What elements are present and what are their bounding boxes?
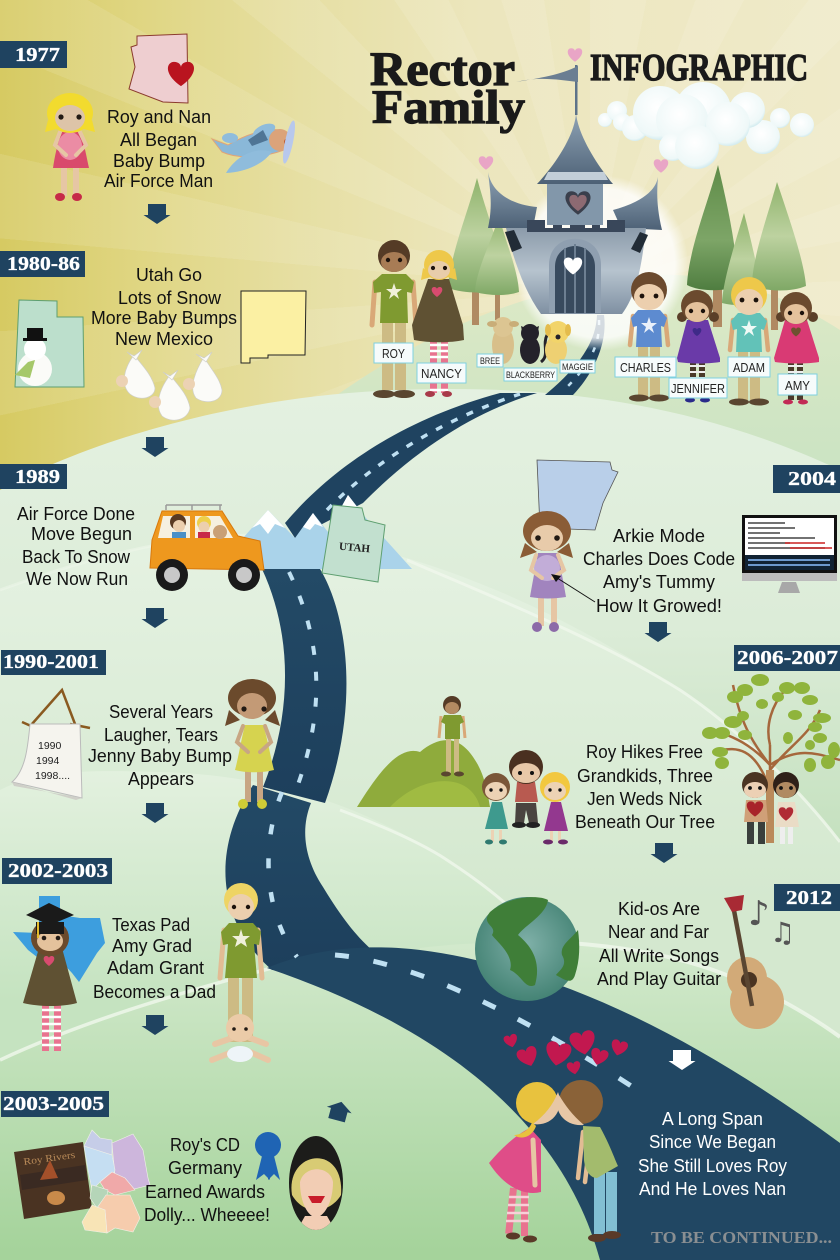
heading: 2004: 2004 bbox=[788, 468, 836, 490]
sign: Utah bbox=[322, 505, 385, 582]
pet: Maggie: MAGGIE bbox=[562, 362, 593, 372]
heading: 2012: 2012 bbox=[786, 887, 832, 909]
arrow down bbox=[142, 1015, 168, 1035]
small Roy hiker bbox=[439, 696, 465, 776]
title bbox=[370, 43, 808, 134]
door arch bbox=[549, 239, 601, 313]
snow caps bbox=[252, 495, 361, 534]
state: New Mexico bbox=[241, 291, 306, 363]
arrow down bbox=[650, 843, 678, 863]
tree right dark bbox=[687, 165, 738, 327]
pink heart top bbox=[568, 48, 582, 62]
icon: music notes: ♫ bbox=[770, 916, 795, 949]
text: 1990 verse: Jenny Baby Bump bbox=[88, 746, 232, 766]
text: 1990 verse: Several Years bbox=[109, 702, 213, 722]
tree left front bbox=[475, 216, 519, 320]
text: 2002 verse: Becomes a Dad bbox=[93, 982, 216, 1002]
pink heart right bbox=[654, 159, 668, 173]
person: Amy: AMY bbox=[785, 378, 810, 393]
photo: Dolly bbox=[289, 1136, 343, 1232]
text: Utah verse: More Baby Bumps bbox=[91, 308, 237, 328]
heart window bbox=[565, 191, 591, 215]
pet: Bree: BREE bbox=[480, 356, 500, 366]
person: Roy bbox=[372, 240, 416, 398]
state: Utah with snowman bbox=[15, 300, 84, 387]
text: 1977 verse bbox=[104, 107, 213, 191]
person: Nancy bbox=[412, 250, 466, 397]
tree right tall bbox=[752, 182, 806, 330]
icon: hanging calendar: 1998.... bbox=[35, 770, 70, 782]
grandkid boy red shirt bbox=[509, 750, 543, 828]
road: castle section bbox=[545, 315, 605, 395]
person: Adam: ADAM bbox=[733, 360, 765, 375]
pale road hill bbox=[0, 389, 840, 1260]
icon: orange car bbox=[150, 505, 264, 591]
text: Utah verse: New Mexico bbox=[115, 329, 213, 349]
right green foreground slope bbox=[420, 943, 840, 1260]
figure: pregnant Nan bbox=[45, 93, 95, 201]
figure: Adam with baby bbox=[212, 883, 268, 1062]
castle body bbox=[506, 228, 646, 314]
heading: 1977: 1977 bbox=[15, 44, 60, 66]
road: lower bend bbox=[225, 785, 372, 970]
text: closing verse: She Still Loves Roy bbox=[638, 1156, 787, 1176]
winding road bbox=[225, 315, 840, 1260]
text: 2006-2007 verse bbox=[575, 742, 715, 832]
text: closing verse: Since We Began bbox=[649, 1132, 776, 1152]
CD cover: Roy Rivers bbox=[23, 1150, 76, 1168]
text: 2006-2007 verse: Roy Hikes Free bbox=[586, 742, 703, 762]
mountain range bbox=[243, 495, 412, 569]
text: 2004 verse: Amy's Tummy bbox=[603, 572, 715, 592]
battlements bbox=[527, 220, 625, 232]
figure: pregnant Jenny bbox=[225, 679, 280, 809]
heading: 2003-2005: 2003-2005 bbox=[3, 1093, 104, 1115]
icon: blue ribbon bbox=[255, 1132, 281, 1180]
text: 2006-2007 verse: Beneath Our Tree bbox=[575, 812, 715, 832]
text: 2004 verse: How It Growed! bbox=[596, 596, 722, 616]
text: 2003-2005 verse: Dolly... Wheeee! bbox=[144, 1205, 270, 1225]
person: Roy: ROY bbox=[382, 346, 405, 361]
text: 1977 verse: Air Force Man bbox=[104, 171, 213, 191]
text: 2006-2007 verse: Grandkids, Three bbox=[577, 766, 713, 786]
text: 1989 verse: Move Begun bbox=[31, 524, 132, 544]
shingle band bbox=[544, 172, 608, 180]
text: 2012 verse: Near and Far bbox=[608, 922, 709, 942]
map: Germany bbox=[82, 1130, 150, 1233]
baby bbox=[212, 1014, 268, 1062]
heading: 2006-2007: 2006-2007 bbox=[737, 647, 838, 669]
icon: globe bbox=[475, 897, 579, 1001]
arrow down white bbox=[668, 1050, 696, 1070]
text: 1990 verse: Appears bbox=[128, 769, 194, 789]
sign: Utah: UTAH bbox=[339, 541, 371, 555]
pets bbox=[477, 317, 595, 381]
left window bbox=[505, 230, 522, 252]
hills with hiking Roy bbox=[357, 696, 490, 807]
road: upper curve bbox=[285, 393, 537, 538]
text: 2003-2005 verse bbox=[144, 1135, 270, 1225]
mountains bbox=[243, 495, 412, 569]
road: wide final stretch bbox=[267, 947, 840, 1260]
title: Family bbox=[372, 81, 525, 134]
text: 1977 verse: Baby Bump bbox=[113, 151, 205, 171]
title: Rector bbox=[370, 43, 515, 96]
state: Arkansas bbox=[537, 460, 618, 530]
hill highlight bands bbox=[0, 535, 840, 1060]
text: 2004 verse: Charles Does Code bbox=[583, 549, 735, 569]
heading: 1989 bbox=[0, 464, 67, 489]
text: 1989 verse: Back To Snow bbox=[22, 547, 131, 567]
right window bbox=[631, 232, 648, 253]
heading: 2002-2003 bbox=[2, 858, 112, 884]
grandkid girl blonde bbox=[540, 772, 570, 844]
cloud bbox=[598, 82, 814, 169]
road: middle section bbox=[262, 569, 346, 803]
heading: 2002-2003: 2002-2003 bbox=[8, 860, 108, 882]
text: 2003-2005 verse: Germany bbox=[168, 1158, 242, 1178]
central tower bbox=[547, 183, 603, 225]
icon: computer monitor bbox=[742, 515, 837, 593]
heading: 1990-2001: 1990-2001 bbox=[3, 651, 99, 673]
text: 1977 verse: Roy and Nan bbox=[107, 107, 211, 127]
icon: hanging calendar bbox=[12, 690, 90, 800]
heading: 2006-2007 bbox=[734, 645, 840, 671]
background sunburst sky bbox=[0, 0, 840, 560]
arrow down bbox=[142, 437, 168, 457]
hearts bbox=[503, 1029, 629, 1075]
text: 2003-2005 verse: Roy's CD bbox=[170, 1135, 240, 1155]
text: 2002 verse: Texas Pad bbox=[112, 915, 190, 935]
person: Jennifer bbox=[669, 290, 727, 402]
icon: hanging calendar: 1990 bbox=[38, 740, 62, 752]
icon: airplane bbox=[212, 120, 297, 173]
text: 1977 verse: All Began bbox=[120, 130, 197, 150]
snowman bbox=[15, 328, 52, 386]
heading: 1977 bbox=[0, 41, 67, 68]
text: closing verse: A Long Span bbox=[662, 1109, 763, 1129]
pink heart left bbox=[479, 156, 493, 170]
right tower roof bbox=[613, 177, 662, 230]
central roof bbox=[537, 113, 613, 184]
heading: 2012 bbox=[774, 884, 840, 911]
icon: hanging calendar: 1994 bbox=[36, 755, 60, 767]
text: 2012 verse: Kid-os Are bbox=[618, 899, 700, 919]
text: 2006-2007 verse: Jen Weds Nick bbox=[587, 789, 703, 809]
text: 2003-2005 verse: Earned Awards bbox=[145, 1182, 265, 1202]
text: 2012 verse bbox=[597, 899, 721, 989]
middle hill bbox=[0, 535, 840, 1260]
CD cover bbox=[14, 1142, 92, 1219]
person: Jennifer: JENNIFER bbox=[671, 381, 725, 396]
text: 1990 verse: Laugher, Tears bbox=[104, 725, 218, 745]
text: 1989 verse bbox=[17, 504, 135, 589]
text: Utah verse bbox=[91, 265, 237, 349]
door stripes bbox=[565, 244, 585, 313]
castle bbox=[479, 48, 668, 314]
flag bbox=[516, 66, 578, 82]
small green hills bbox=[357, 740, 490, 807]
footer: to be continued: TO BE CONTINUED... bbox=[651, 1228, 832, 1247]
tree left back bbox=[448, 178, 506, 325]
text: 2002 verse bbox=[93, 915, 216, 1002]
heading: 1980-86: 1980-86 bbox=[7, 253, 80, 275]
person: Nancy: NANCY bbox=[421, 366, 462, 381]
heading: 1980-86 bbox=[0, 251, 85, 277]
figures: three grandkids bbox=[482, 750, 570, 844]
inner heart bbox=[569, 195, 587, 211]
pet: Blackberry: BLACKBERRY bbox=[506, 370, 555, 380]
lower hill bbox=[0, 771, 560, 1260]
tree right middle bbox=[722, 213, 762, 305]
left green foreground slope bbox=[0, 960, 600, 1260]
text: 1989 verse: Air Force Done bbox=[17, 504, 135, 524]
left tower roof bbox=[488, 172, 537, 228]
person: Amy bbox=[774, 292, 819, 404]
back hill behind castle bbox=[330, 275, 840, 520]
graduation cap bbox=[26, 903, 74, 925]
door heart bbox=[564, 257, 582, 275]
person: Charles: CHARLES bbox=[620, 360, 671, 375]
text: Utah verse: Utah Go bbox=[136, 265, 202, 285]
figure: kissing boy bbox=[557, 1080, 621, 1242]
figure: Jen and Nick under the tree bbox=[742, 772, 799, 844]
heading: 2003-2005 bbox=[1, 1091, 109, 1117]
flag pole bbox=[575, 65, 578, 115]
icon: music notes: ♪ bbox=[748, 894, 770, 934]
text: 2002 verse: Adam Grant bbox=[107, 958, 204, 978]
door bbox=[555, 246, 595, 313]
arrow down bbox=[144, 204, 170, 224]
person: Charles bbox=[615, 272, 676, 402]
icon: three baby bundles bbox=[116, 350, 222, 420]
castle glow bbox=[512, 175, 688, 351]
text: 2012 verse: And Play Guitar bbox=[597, 969, 721, 989]
arrow down bbox=[142, 803, 168, 823]
arrow up bbox=[324, 1099, 354, 1123]
text: 2012 verse: All Write Songs bbox=[599, 946, 719, 966]
text: closing verse bbox=[638, 1109, 787, 1199]
grandkid girl teal bbox=[482, 773, 510, 844]
figure: kissing girl bbox=[489, 1082, 560, 1242]
text: 2004 verse bbox=[583, 526, 735, 616]
figure: Amy graduate bbox=[23, 903, 77, 1051]
text: 1990 verse bbox=[88, 702, 232, 789]
text: Utah verse: Lots of Snow bbox=[118, 288, 222, 308]
text: 2002 verse: Amy Grad bbox=[112, 936, 192, 956]
heading: 1989: 1989 bbox=[15, 466, 60, 488]
tree of leaves bbox=[702, 674, 840, 843]
text: 1989 verse: We Now Run bbox=[26, 569, 128, 589]
arrow down bbox=[142, 608, 168, 628]
icon: music notes bbox=[748, 894, 795, 949]
text: 2004 verse: Arkie Mode bbox=[613, 526, 705, 546]
arrow down bbox=[644, 622, 672, 642]
road dashes bbox=[268, 320, 642, 1093]
state: Arizona bbox=[129, 34, 194, 103]
state: Texas bbox=[13, 896, 105, 982]
figure: pregnant Amy bbox=[520, 511, 595, 632]
text: closing verse: And He Loves Nan bbox=[639, 1179, 786, 1199]
heading: 2004 bbox=[773, 465, 840, 493]
person: Adam bbox=[728, 277, 770, 406]
icon: guitar bbox=[724, 895, 784, 1029]
